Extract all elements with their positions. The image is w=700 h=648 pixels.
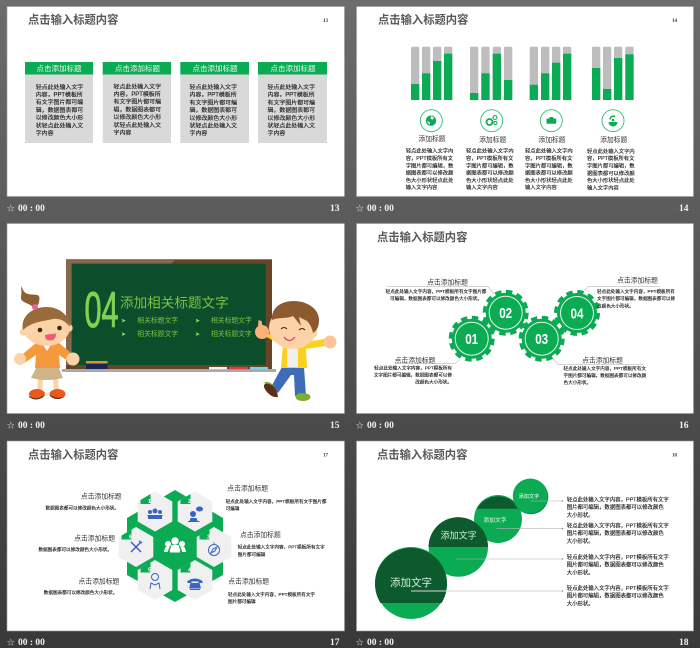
column 3 text: 添加标题 — [538, 135, 566, 144]
board list: 相关标题文字 — [211, 316, 252, 324]
footer bars: 00 : 00 — [367, 638, 394, 648]
card 1: 以修改颜色大小形 — [36, 114, 83, 122]
card 3: 状轻点此处输入文 — [190, 122, 237, 130]
card 1: 轻点此处输入文字 — [36, 83, 83, 91]
label left 3: 点击添加标题 — [79, 576, 120, 586]
callout 03 — [564, 356, 647, 386]
icon: telephone — [188, 578, 202, 590]
column 1 text: 字图片都可编辑，数 — [406, 161, 454, 169]
board list: ➤ — [121, 318, 126, 324]
column 1 text: 据图表都可以修改颜 — [406, 168, 454, 176]
card 4: 字内容 — [268, 129, 285, 137]
column 1 text: 添加标题 — [418, 134, 446, 143]
footer bars: ☆ — [6, 204, 15, 214]
label left 3 — [44, 576, 120, 596]
circle 4: 添加文字 — [519, 492, 539, 500]
icon: team (center) — [164, 537, 186, 552]
label right 2: 轻点此处输入文字内容，PPT模板所有文字 — [238, 544, 325, 551]
label right 3: 轻点此处输入文字内容，PPT模板所有文字 — [228, 591, 315, 598]
callout 04 — [597, 275, 676, 309]
label left 1 — [45, 492, 122, 512]
gear 02: 02 — [499, 306, 512, 322]
blackboard — [62, 259, 276, 372]
slide 13 page number: 13 — [323, 19, 328, 24]
circle 2 — [429, 517, 488, 577]
text block 4: 大小形状。 — [567, 599, 594, 607]
icon: briefcase — [540, 110, 562, 132]
callout 02: 轻点此处输入文字内容，PPT模板所有文字图片都 — [386, 288, 487, 295]
circle 4 — [513, 478, 548, 514]
label left 2: 点击添加标题 — [74, 534, 115, 542]
column 3 text — [525, 135, 573, 191]
panel: slide 14 — [356, 6, 694, 196]
board list: ➤ — [195, 332, 200, 338]
board list: 相关标题文字 — [137, 329, 178, 338]
hexagon diagram: 6 — [129, 534, 132, 540]
card 2: 字内容 — [114, 128, 131, 136]
footer bars: 18 — [679, 638, 689, 648]
column 2 text: 输入文字内容 — [466, 183, 498, 191]
text block 3: 大小形状。 — [567, 568, 594, 576]
card 2: 轻点此处输入文字 — [114, 82, 161, 90]
card 1: 点击添加标题 — [36, 63, 82, 73]
card 1: 有文字图片都可编 — [36, 98, 83, 106]
panel: slide 17 — [7, 441, 344, 631]
icon: globe — [420, 110, 442, 132]
footer bars: 00 : 00 — [18, 204, 45, 214]
footer bars: 00 : 00 — [18, 638, 45, 648]
hexagon diagram — [119, 490, 231, 602]
column 1 text: 轻点此处输入文字内 — [406, 147, 453, 155]
callout 02: 可编辑，数据图表都可以修改颜色大小形状。 — [390, 295, 482, 302]
label right 1 — [226, 484, 327, 512]
label right 2 — [238, 530, 325, 558]
card 4: 内容，PPT模板所 — [268, 91, 315, 99]
callout 01: 文字图片都可编辑，数据图表都可以修 — [374, 372, 452, 378]
card 3: 字内容 — [190, 129, 207, 137]
slide 18 page number: 18 — [672, 454, 678, 458]
column 3 text: 色大小形状轻点此处 — [525, 176, 573, 184]
circle 3 — [474, 495, 522, 543]
circle 3: 添加文字 — [483, 516, 507, 524]
callout 02 — [386, 277, 487, 302]
card 2: 状轻点此处输入文 — [114, 121, 161, 129]
card 3: 辑，数据图表都可 — [190, 106, 237, 114]
column 2 text — [466, 135, 514, 191]
footer bars: 17 — [330, 638, 340, 648]
callout 03: 字图片都可编辑，数据图表都可以修改颜 — [564, 372, 647, 379]
footer bars: ☆ — [356, 420, 364, 432]
label right 2: 点击添加标题 — [240, 530, 281, 539]
board list: 相关标题文字 — [137, 316, 178, 324]
text block 2: 图片都可编辑，数据图表都可以修改颜色 — [567, 529, 664, 537]
column 4 text: 输入文字内容 — [587, 183, 619, 191]
callout 01 — [374, 356, 452, 386]
label left 3: 数据图表都可以修改颜色大小形状。 — [44, 589, 117, 596]
panel: slide 18 — [356, 441, 694, 631]
board heading: 添加相关标题文字 — [120, 296, 229, 310]
column 2 text: 容，PPT模板所有文 — [466, 154, 514, 162]
bar chart 1 — [411, 47, 452, 100]
callout 04: 轻点此处输入文字内容，PPT模板所有 — [597, 288, 675, 295]
footer bars — [6, 204, 689, 648]
column 2 text: 轻点此处输入文字内 — [466, 147, 514, 155]
card 1: 状轻点此处输入文 — [36, 121, 83, 129]
hexagon diagram: 3 — [207, 534, 210, 540]
gear 02 — [485, 292, 527, 334]
callout 02: 点击添加标题 — [427, 277, 468, 286]
text block 4: 图片都可编辑，数据图表都可以修改颜色 — [567, 592, 664, 600]
footer bars: 15 — [330, 421, 340, 431]
circle 2: 添加文字 — [441, 530, 477, 540]
label left 2 — [38, 534, 115, 553]
column 4 text — [587, 135, 635, 191]
column 4 text: 据图表都可以修改颜 — [587, 169, 635, 177]
column 1 text: 色大小形状轻点此处 — [406, 176, 454, 184]
leader lines — [411, 500, 563, 592]
column 1 text — [406, 134, 454, 191]
hexagon diagram: 2 — [188, 499, 191, 505]
slide 14 title: 点击输入标题内容 — [378, 12, 468, 26]
callout 01: 点击添加标题 — [395, 356, 436, 364]
text block 2: 轻点此处输入文字内容，PPT模板所有文字 — [567, 522, 669, 530]
board list: ➤ — [195, 318, 200, 324]
footer bars: 13 — [330, 204, 340, 214]
card 3 — [180, 62, 249, 143]
column 2 text: 据图表都可以修改颜 — [466, 168, 514, 176]
card 4: 有文字图片都可编 — [268, 98, 315, 106]
card 1: 辑，数据图表都可 — [36, 106, 83, 114]
card 3: 轻点此处输入文字 — [190, 83, 237, 91]
label right 3: 图片都可编辑 — [228, 598, 256, 605]
column 3 text: 轻点此处输入文字内 — [525, 147, 573, 155]
label left 1: 点击添加标题 — [81, 492, 122, 500]
label right 1: 轻点此处输入文字内容，PPT模板所有文字图片都 — [226, 498, 327, 505]
card 3: 有文字图片都可编 — [190, 98, 237, 106]
slide 17 title: 点击输入标题内容 — [28, 448, 118, 462]
card 2: 辑，数据图表都可 — [114, 105, 161, 113]
card 1: 内容，PPT模板所 — [36, 90, 83, 98]
card 4: 状轻点此处输入文 — [268, 122, 315, 130]
card 4: 辑，数据图表都可 — [268, 106, 315, 114]
icon: group — [148, 508, 162, 519]
card 3: 点击添加标题 — [192, 63, 238, 73]
gear 03 — [521, 318, 563, 360]
hexagon diagram: 5 — [148, 568, 151, 574]
gear 04: 04 — [570, 306, 584, 322]
text block 3: 轻点此处输入文字内容，PPT模板所有文字 — [567, 553, 669, 561]
illustration: boy — [255, 301, 336, 401]
card 4: 点击添加标题 — [270, 63, 316, 73]
slide 13 title: 点击输入标题内容 — [28, 12, 118, 26]
icon: hand and plant — [602, 110, 624, 132]
board list: ➤ — [121, 332, 126, 338]
label right 1: 点击添加标题 — [227, 484, 268, 492]
column 4 text: 字图片都可编辑，数 — [587, 162, 635, 170]
hexagon diagram: 4 — [188, 568, 192, 574]
panel: slide 16 — [356, 224, 694, 414]
gear 03: 03 — [535, 332, 548, 348]
column 3 text: 据图表都可以修改颜 — [525, 168, 573, 176]
card 2: 内容，PPT模板所 — [114, 90, 161, 98]
card 2: 有文字图片都可编 — [114, 98, 161, 106]
bar chart 4 — [592, 47, 634, 100]
connector lines — [387, 287, 660, 364]
card 4 — [258, 62, 327, 143]
text block 2: 大小形状。 — [567, 537, 594, 545]
gear 04 — [556, 292, 598, 334]
slide 18 title: 点击输入标题内容 — [377, 448, 467, 462]
text block 1: 大小形状。 — [567, 511, 594, 519]
callout 03: 点击添加标题 — [582, 356, 623, 364]
callout 03: 色大小形状。 — [564, 379, 591, 386]
column 2 text: 添加标题 — [479, 135, 506, 144]
icon: tools — [131, 541, 142, 552]
illustration: girl — [14, 286, 80, 400]
label right 2: 图片都可编辑 — [238, 551, 266, 558]
footer bars: 16 — [679, 421, 689, 431]
big number 04: 04 — [84, 282, 118, 338]
callout 04: 文字图片都可编辑，数据图表都可以修 — [597, 295, 676, 302]
footer bars: 14 — [679, 204, 689, 214]
card 3: 以修改颜色大小形 — [190, 114, 237, 122]
icon: speaker with bubble — [188, 506, 203, 522]
board list: 相关标题文字 — [211, 329, 252, 338]
column 3 text: 字图片都可编辑，数 — [525, 161, 573, 169]
footer bars: 00 : 00 — [367, 421, 394, 431]
slide 17 page number: 17 — [323, 454, 328, 458]
card 1: 字内容 — [36, 129, 54, 137]
column 4 text: 添加标题 — [600, 135, 627, 144]
text block 1: 图片都可编辑，数据图表都可以修改颜色 — [567, 503, 664, 511]
column 2 text: 字图片都可编辑，数 — [466, 161, 514, 169]
icon: compass — [208, 542, 220, 556]
footer bars: 00 : 00 — [367, 204, 394, 214]
text block 3: 图片都可编辑，数据图表都可以修改颜色 — [567, 561, 664, 569]
label left 1: 数据图表都可以修改颜色大小形状。 — [45, 504, 119, 512]
panel: slide 15 — [7, 224, 344, 414]
column 4 text: 容，PPT模板所有文 — [587, 154, 635, 162]
card 4: 轻点此处输入文字 — [268, 83, 315, 91]
card 4: 以修改颜色大小形 — [268, 114, 315, 122]
gear 01: 01 — [465, 332, 478, 348]
text block 4: 轻点此处输入文字内容，PPT模板所有文字 — [567, 584, 669, 592]
text block 1: 轻点此处输入文字内容，PPT模板所有文字 — [567, 496, 669, 504]
label right 1: 可编辑 — [226, 505, 240, 512]
card 2: 点击添加标题 — [115, 63, 160, 73]
card 1 — [25, 62, 93, 143]
callout 03: 轻点此处输入文字内容，PPT模板所有文 — [564, 365, 646, 372]
footer bars: 00 : 00 — [18, 421, 45, 431]
callout 04: 改颜色大小形状。 — [597, 302, 634, 309]
column 1 text: 容，PPT模板所有文 — [406, 154, 454, 162]
bar chart 3 — [530, 47, 571, 100]
callout 04: 点击添加标题 — [617, 275, 658, 284]
label right 3: 点击添加标题 — [228, 576, 269, 586]
column 3 text: 容，PPT模板所有文 — [525, 154, 573, 162]
slide 14 page number: 14 — [672, 19, 678, 24]
panel: slide 13 — [7, 6, 344, 196]
bar chart 2 — [470, 47, 512, 100]
column 4 text: 色大小形状轻点此处 — [587, 176, 635, 184]
column 1 text: 输入文字内容 — [406, 183, 438, 191]
column 2 text: 色大小形状轻点此处 — [466, 176, 514, 184]
column 4 text: 轻点此处输入文字内 — [587, 147, 635, 155]
column 3 text: 输入文字内容 — [525, 183, 557, 191]
label right 3 — [228, 576, 315, 605]
label left 2: 数据图表都可以修改颜色大小形状。 — [38, 546, 112, 553]
footer bars: ☆ — [356, 204, 364, 214]
board list — [121, 316, 252, 338]
callout 01: 轻点此处输入文字内容，PPT模板所有 — [374, 364, 452, 372]
circle 1: 添加文字 — [390, 576, 432, 589]
icon: gears — [481, 110, 503, 132]
circle 1 — [375, 547, 447, 619]
slide 16 title: 点击输入标题内容 — [377, 230, 467, 244]
gear 01 — [451, 318, 493, 360]
callout 01: 改颜色大小形状。 — [415, 378, 452, 386]
card 2: 以修改颜色大小形 — [114, 113, 161, 121]
icon: person outline — [150, 574, 160, 589]
card 3: 内容，PPT模板所 — [190, 91, 237, 99]
card 2 — [103, 62, 171, 143]
hexagon diagram: 1 — [148, 499, 151, 505]
footer bars: ☆ — [6, 420, 15, 432]
